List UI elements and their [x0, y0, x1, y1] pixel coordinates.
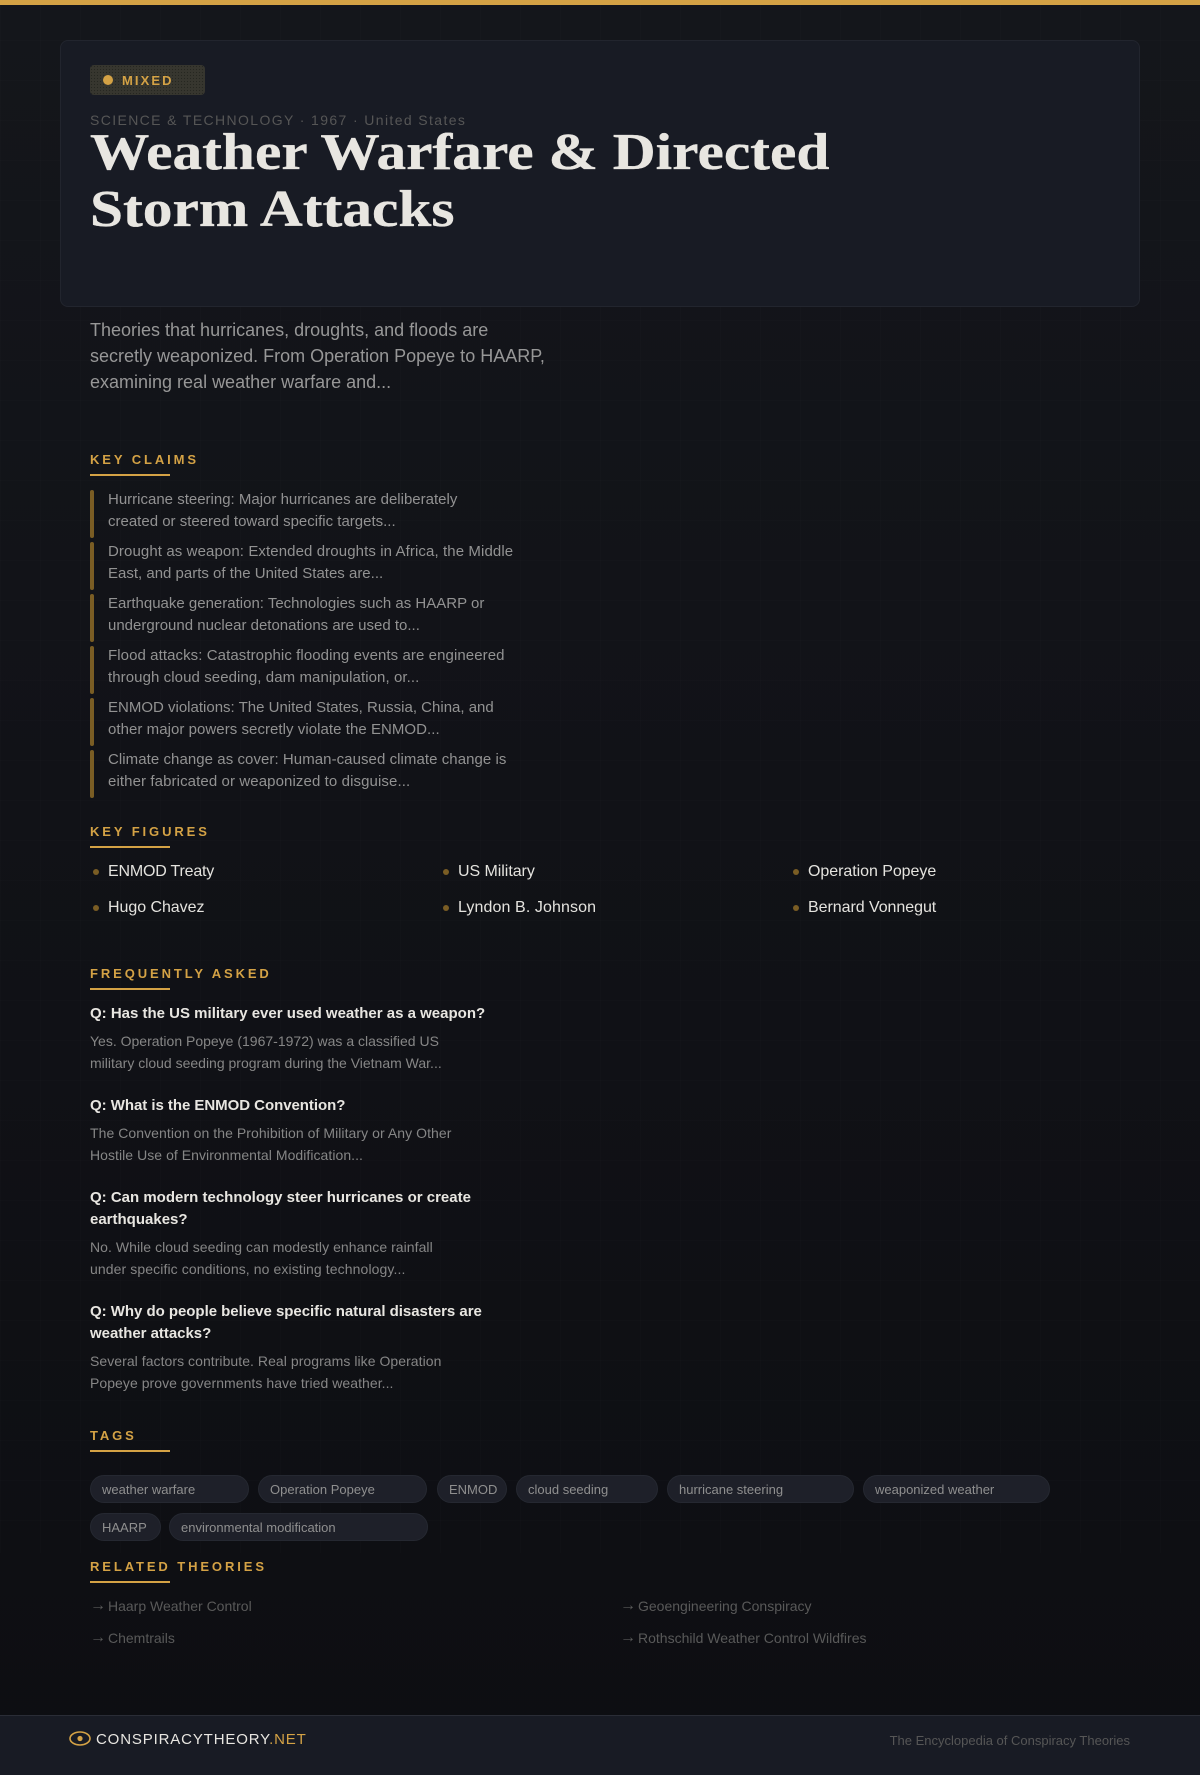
heading: tags: TAGS — [90, 1428, 137, 1443]
question 3: earthquakes? — [90, 1211, 188, 1228]
claim 1: created or steered toward specific targets... — [108, 513, 396, 530]
question 4: weather attacks? — [90, 1325, 211, 1342]
tag — [863, 1475, 1050, 1503]
answer 4 — [90, 1353, 441, 1391]
tag list — [90, 1475, 1050, 1541]
question 3: Q: Can modern technology steer hurricanes or create — [90, 1189, 471, 1206]
answer 3 — [90, 1239, 433, 1277]
description: secretly weaponized. From Operation Popeye to HAARP, — [90, 346, 545, 366]
tag: environmental modification — [181, 1520, 336, 1535]
tagline: The Encyclopedia of Conspiracy Theories — [890, 1733, 1130, 1748]
answer 2 — [90, 1125, 452, 1163]
tag — [258, 1475, 427, 1503]
answer 3: under specific conditions, no existing technology... — [90, 1261, 405, 1277]
claim 5 — [90, 698, 494, 746]
question 2: Q: What is the ENMOD Convention? — [90, 1097, 345, 1114]
tag — [437, 1475, 507, 1503]
answer 4: Popeye prove governments have tried weather... — [90, 1375, 393, 1391]
description — [90, 320, 545, 392]
answer 4: Several factors contribute. Real programs like Operation — [90, 1353, 441, 1369]
link: Geoengineering Conspiracy: → — [620, 1597, 636, 1614]
category and date line: SCIENCE & TECHNOLOGY · 1967 · United States — [90, 112, 466, 128]
claim 3 — [90, 594, 484, 642]
list: key figures — [93, 863, 936, 916]
footer — [0, 1715, 1200, 1775]
answer 1: Yes. Operation Popeye (1967-1972) was a classified US — [90, 1033, 439, 1049]
tag: hurricane steering — [679, 1482, 783, 1497]
tag — [90, 1475, 249, 1503]
description: examining real weather warfare and... — [90, 372, 391, 392]
claim 4 — [90, 646, 505, 694]
heading: related theories: RELATED THEORIES — [90, 1559, 267, 1574]
tag: weather warfare — [102, 1482, 195, 1497]
claim 1: Hurricane steering: Major hurricanes are deliberately — [108, 491, 457, 508]
answer 2: The Convention on the Prohibition of Military or Any Other — [90, 1125, 451, 1141]
title: Storm Attacks — [90, 181, 455, 238]
answer 1: military cloud seeding program during the Vietnam War... — [90, 1055, 442, 1071]
tag: HAARP — [102, 1520, 147, 1535]
tag: weaponized weather — [875, 1482, 994, 1497]
figure: ENMOD Treaty: ENMOD Treaty — [108, 863, 214, 880]
heading: key figures: KEY FIGURES — [90, 824, 210, 839]
title — [90, 124, 829, 238]
claim 2: Drought as weapon: Extended droughts in Africa, the Middle — [108, 543, 513, 560]
tag: ENMOD — [449, 1482, 497, 1497]
tag — [516, 1475, 658, 1503]
tag — [169, 1513, 428, 1541]
answer 2: Hostile Use of Environmental Modification... — [90, 1147, 363, 1163]
logo wordmark: CONSPIRACYTHEORY.NET — [96, 1731, 307, 1748]
link: Rothschild Weather Control Wildfires: Rothschild Weather Control Wildfires — [638, 1630, 866, 1646]
badge label: MIXED — [122, 73, 174, 88]
claim 5: ENMOD violations: The United States, Russia, China, and — [108, 699, 494, 716]
question 1: Q: Has the US military ever used weather as a weapon? — [90, 1005, 485, 1022]
icon: badge dot — [103, 75, 113, 85]
claim 3: Earthquake generation: Technologies such as HAARP or — [108, 595, 484, 612]
figure: Lyndon B. Johnson: Lyndon B. Johnson — [458, 899, 596, 916]
link: Haarp Weather Control: → — [90, 1597, 106, 1614]
link: Haarp Weather Control: Haarp Weather Control — [108, 1598, 252, 1614]
title: Weather Warfare & Directed — [90, 124, 829, 181]
tag: cloud seeding — [528, 1482, 608, 1497]
answer 1 — [90, 1033, 442, 1071]
claim 5: other major powers secretly violate the ENMOD... — [108, 721, 440, 738]
list: key claims — [90, 490, 513, 798]
figure: US Military: US Military — [458, 863, 535, 880]
question 4: Q: Why do people believe specific natural disasters are — [90, 1303, 482, 1320]
question 4 — [90, 1303, 482, 1342]
panel: header card — [60, 40, 1140, 307]
question 3 — [90, 1189, 471, 1228]
description: Theories that hurricanes, droughts, and floods are — [90, 320, 488, 340]
badge: mixed verdict — [90, 65, 205, 95]
heading: frequently asked: FREQUENTLY ASKED — [90, 966, 272, 981]
related links — [90, 1597, 866, 1646]
link: Chemtrails: → — [90, 1629, 106, 1646]
link: Chemtrails: Chemtrails — [108, 1630, 175, 1646]
claim 2 — [90, 542, 513, 590]
claim 4: through cloud seeding, dam manipulation, or... — [108, 669, 419, 686]
claim 6: Climate change as cover: Human-caused climate change is — [108, 751, 506, 768]
claim 2: East, and parts of the United States are... — [108, 565, 383, 582]
claim 1 — [90, 490, 458, 538]
tag — [90, 1513, 161, 1541]
answer 3: No. While cloud seeding can modestly enhance rainfall — [90, 1239, 433, 1255]
icon: eye logo — [69, 1731, 91, 1746]
link: Rothschild Weather Control Wildfires: → — [620, 1629, 636, 1646]
claim 6: either fabricated or weaponized to disguise... — [108, 773, 410, 790]
tag — [667, 1475, 854, 1503]
claim 3: underground nuclear detonations are used to... — [108, 617, 420, 634]
link: Geoengineering Conspiracy: Geoengineering Conspiracy — [638, 1598, 812, 1614]
figure: Bernard Vonnegut: Bernard Vonnegut — [808, 899, 936, 916]
heading: key claims: KEY CLAIMS — [90, 452, 199, 467]
claim 4: Flood attacks: Catastrophic flooding events are engineered — [108, 647, 505, 664]
claim 6 — [90, 750, 506, 798]
figure: Operation Popeye: Operation Popeye — [808, 863, 936, 880]
tag: Operation Popeye — [270, 1482, 375, 1497]
figure: Hugo Chavez: Hugo Chavez — [108, 899, 204, 916]
